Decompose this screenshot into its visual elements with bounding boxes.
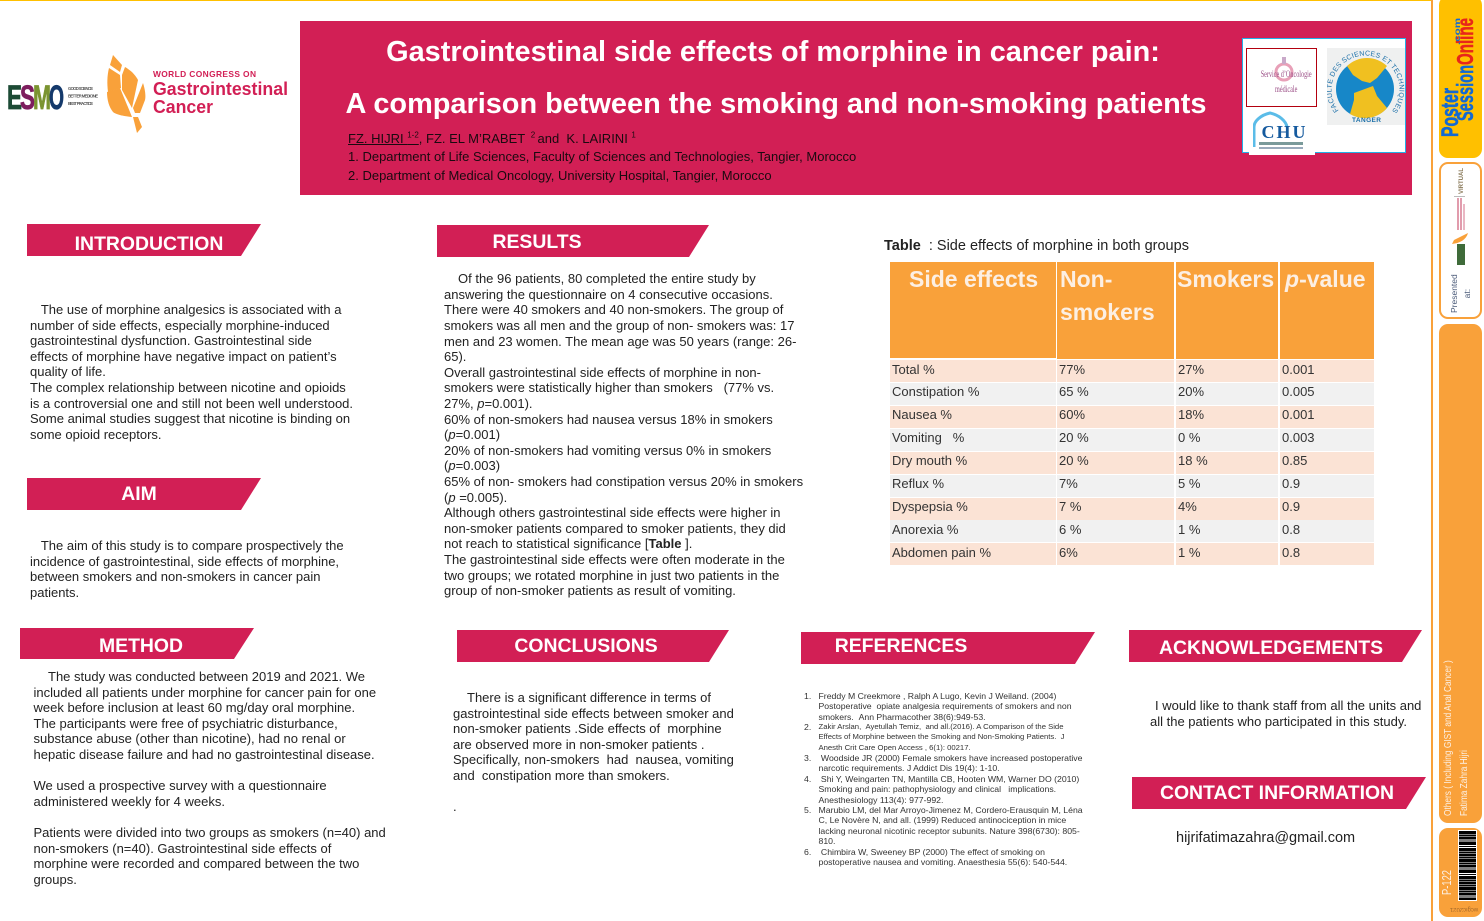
- text: method: non-smokers (n=40). Gastrointestinal side effects of: [34, 841, 331, 856]
- logo: faculty of sciences: TANGER: [1352, 117, 1381, 124]
- authors and affiliations: [348, 131, 856, 183]
- table rows: 60%: [1059, 407, 1085, 422]
- barcode caption: wcgic2021: [1450, 906, 1478, 912]
- text: method: week before inclusion at least 60 mg/day oral morphine.: [34, 700, 355, 715]
- text: method: substance abuse (other than nicotine), had no renal or: [34, 731, 346, 746]
- topic and author text: Others ( Including GIST and Anal Cancer ): [1443, 660, 1454, 816]
- text: method: included all patients under morphine for cancer pain for one: [34, 685, 376, 700]
- reference 1: 1.: [804, 691, 811, 701]
- reference list: Effects of Morphine between the Smoking and Non-Smoking Patients. J: [818, 732, 1064, 741]
- icon: ESMO wordmark: M: [33, 79, 51, 117]
- logo: CHU: CHU: [1262, 122, 1308, 142]
- icon: orange leaf: [107, 55, 145, 133]
- icon: ESMO wordmark: GOOD SCIENCE: [68, 86, 93, 91]
- text: results: (p=0.001): [444, 427, 500, 442]
- reference list: 810.: [818, 836, 835, 846]
- table rows: Constipation %: [892, 384, 979, 399]
- text: results: answering the questionnaire on 4 consecutive occasions.: [444, 287, 773, 302]
- heading: aim: AIM: [121, 483, 157, 505]
- text: results: not reach to statistical significance [Table ].: [444, 536, 692, 551]
- label: presented at: Presented: [1449, 274, 1459, 313]
- table rows: 5 %: [1178, 476, 1200, 491]
- title: Gastrointestinal side effects of morphine in cancer pain:: [386, 36, 1160, 68]
- logo text: .com: [1453, 18, 1462, 45]
- text: results: 65% of non- smokers had constipation versus 20% in smokers: [444, 474, 803, 489]
- reference 2: 2.: [804, 722, 811, 732]
- wordmark: congress name: [153, 69, 288, 117]
- table rows: 0.9: [1282, 476, 1300, 491]
- table rows: 6%: [1059, 545, 1078, 560]
- reference 1: [804, 691, 1072, 722]
- table rows: [890, 360, 1374, 565]
- heading: method: [20, 628, 254, 659]
- divider: [1454, 196, 1465, 197]
- sidebar box: presented at: [1439, 162, 1482, 319]
- table header: p-value: [1285, 266, 1366, 292]
- text: introduction: The use of morphine analgesics is associated with a: [41, 302, 341, 317]
- label: virtual: VIRTUAL: [1459, 168, 1465, 194]
- text: introduction: is a controversial one and still not been well understood.: [30, 396, 353, 411]
- top rule: [0, 0, 1431, 1]
- sidebar panel: topic and author: [1439, 324, 1482, 823]
- text: method: morphine were recorded and compared between the two: [34, 856, 359, 871]
- table header: Smokers: [1177, 266, 1274, 292]
- reference 4: 4.: [804, 774, 811, 784]
- table rows: 0.8: [1282, 545, 1300, 560]
- table rows: 20 %: [1059, 453, 1089, 468]
- text: aim: patients.: [30, 585, 79, 600]
- text: aim: incidence of gastrointestinal, side effects of morphine,: [30, 554, 339, 569]
- reference list: postoperative nausea and vomiting. Anaesthesia 55(6): 540-544.: [818, 857, 1067, 867]
- table rows: 1 %: [1178, 522, 1200, 537]
- text: conclusions: are observed more in non-smoker patients .: [453, 737, 704, 752]
- table rows: 0 %: [1178, 430, 1200, 445]
- reference 6: [804, 847, 1067, 867]
- table rows: 1 %: [1178, 545, 1200, 560]
- text: aim: The aim of this study is to compare prospectively the: [41, 538, 344, 553]
- text: results: Of the 96 patients, 80 completed the entire study by: [458, 271, 756, 286]
- logo: service d'oncologie: [1246, 48, 1317, 107]
- table rows: 18%: [1178, 407, 1204, 422]
- reference list: Anesth Crit Care Open Access , 6(1): 00217.: [818, 743, 971, 752]
- authors and affiliations: FZ. HIJRI 1-2, FZ. EL M’RABET 2 and K. LAIRINI 1: [348, 131, 636, 146]
- icon: ESMO wordmark: BEST PRACTICE: [68, 101, 93, 106]
- text: method: Patients were divided into two groups as smokers (n=40) and: [34, 825, 386, 840]
- table rows: Dyspepsia %: [892, 499, 968, 514]
- heading: contact information: CONTACT INFORMATION: [1160, 782, 1394, 804]
- text: results: 20% of non-smokers had vomiting versus 0% in smokers: [444, 443, 771, 458]
- reference list: Woodside JR (2000) Female smokers have increased postoperative: [821, 753, 1082, 763]
- text: introduction: number of side effects, especially morphine-induced: [30, 318, 330, 333]
- table rows: 0.005: [1282, 384, 1315, 399]
- text: results: Overall gastrointestinal side effects of morphine in non-: [444, 365, 761, 380]
- logo text: Session: [1452, 65, 1478, 121]
- text: conclusions: [453, 690, 734, 814]
- text: introduction: [30, 302, 353, 442]
- reference list: lacking neuronal nicotinic receptor subunits. Nature 398(6730): 805-: [818, 826, 1080, 836]
- logo text: [1439, 18, 1478, 137]
- text: results: The gastrointestinal side effects were often moderate in the: [444, 552, 785, 567]
- text: results: men and 23 women. The mean age was 50 years (range: 26-: [444, 334, 796, 349]
- heading: method: METHOD: [99, 635, 183, 657]
- sidebar panel: barcode: [1439, 828, 1482, 917]
- heading: conclusions: CONCLUSIONS: [514, 635, 658, 657]
- poster number: P-122: [1439, 870, 1454, 895]
- table rows: 6 %: [1059, 522, 1081, 537]
- label: presented at: [1449, 274, 1472, 313]
- heading: acknowledgements: [1129, 630, 1422, 662]
- barcode: [1458, 830, 1477, 901]
- text: method: The study was conducted between 2019 and 2021. We: [48, 669, 365, 684]
- topic and author text: Fatima Zahra Hijri: [1459, 750, 1470, 816]
- text: results: 60% of non-smokers had nausea versus 18% in smokers: [444, 412, 773, 427]
- table rows: 0.85: [1282, 453, 1307, 468]
- reference list: [804, 691, 1083, 867]
- icon: ESMO wordmark: E: [7, 79, 22, 117]
- icon: ESMO wordmark: S: [20, 79, 35, 117]
- reference 5: 5.: [804, 805, 811, 815]
- reference list: Zakir Arslan, Ayetullah Temiz, and all.(2016). A Comparison of the Side: [818, 722, 1064, 731]
- heading: introduction: INTRODUCTION: [75, 233, 223, 255]
- text: method: The participants were free of psychiatric disturbance,: [34, 716, 338, 731]
- mini logo: [1452, 198, 1468, 265]
- reference 4: [804, 774, 1079, 805]
- table rows: Dry mouth %: [892, 453, 967, 468]
- table rows: 65 %: [1059, 384, 1089, 399]
- table rows: 27%: [1178, 362, 1204, 377]
- heading: references: REFERENCES: [835, 635, 967, 657]
- text: introduction: Some animal studies suggest that nicotine is binding on: [30, 411, 350, 426]
- text: results: two groups; we rotated morphine in just two patients in the: [444, 568, 779, 583]
- text: introduction: some opioid receptors.: [30, 427, 162, 442]
- heading: references: [801, 632, 1095, 664]
- reference list: C, Le Novère N, and all. (1999) Reduced antinociception in mice: [818, 815, 1066, 825]
- table caption: Table : Side effects of morphine in both groups: [884, 238, 1189, 254]
- heading: results: [437, 225, 709, 257]
- reference list: Anesthesiology 113(4): 977-992.: [818, 795, 943, 805]
- table rows: 0.003: [1282, 430, 1315, 445]
- reference 5: [804, 805, 1083, 846]
- text: acknowledgements: [1150, 698, 1421, 729]
- text: acknowledgements: I would like to thank staff from all the units and: [1155, 698, 1421, 713]
- text: conclusions: There is a significant difference in terms of: [467, 690, 711, 705]
- reference 3: 3.: [804, 753, 811, 763]
- table header: smokers: [1060, 299, 1155, 325]
- wordmark: congress name: Cancer: [153, 97, 213, 117]
- text: conclusions: .: [453, 799, 457, 814]
- reference list: Shi Y, Weingarten TN, Mantilla CB, Hooten WM, Warner DO (2010): [821, 774, 1079, 784]
- topic and author text: [1443, 660, 1470, 816]
- text: aim: between smokers and non-smokers in cancer pain: [30, 569, 320, 584]
- heading: contact information: [1132, 777, 1426, 809]
- reference 3: [804, 753, 1082, 773]
- text: conclusions: non-smoker patients .Side effects of morphine: [453, 721, 722, 736]
- logo: faculty of sciences: FACULTE DES SCIENCES ET TECHNIQUES: [1327, 50, 1404, 113]
- table rows: 0.9: [1282, 499, 1300, 514]
- text: email: hijrifatimazahra@gmail.com: [1176, 830, 1355, 846]
- heading: acknowledgements: ACKNOWLEDGEMENTS: [1159, 637, 1383, 659]
- sidebar: [1431, 0, 1482, 921]
- label: presented at: at:: [1462, 289, 1472, 298]
- table header: [890, 262, 1374, 359]
- text: results: non-smoker patients compared to smoker patients, they did: [444, 521, 786, 536]
- table rows: 20 %: [1059, 430, 1089, 445]
- text: method: [34, 669, 386, 887]
- text: results: (p =0.005).: [444, 490, 507, 505]
- text: results: 27%, p=0.001).: [444, 396, 533, 411]
- table rows: 0.001: [1282, 407, 1315, 422]
- text: conclusions: and constipation more than smokers.: [453, 768, 670, 783]
- reference list: Marubio LM, del Mar Arroyo-Jimenez M, Cordero-Erausquin M, Léna: [818, 805, 1083, 815]
- table rows: 77%: [1059, 362, 1085, 377]
- table rows: Reflux %: [892, 476, 944, 491]
- reference list: Smoking and pain: pathophysiology and clinical implications.: [818, 784, 1056, 794]
- table rows: 4%: [1178, 499, 1197, 514]
- logo: service d'oncologie: médicale: [1275, 85, 1297, 95]
- authors and affiliations: 2. Department of Medical Oncology, University Hospital, Tangier, Morocco: [348, 168, 772, 183]
- table rows: Anorexia %: [892, 522, 958, 537]
- table rows: 0.001: [1282, 362, 1315, 377]
- wordmark: congress name: WORLD CONGRESS ON: [153, 69, 256, 79]
- authors and affiliations: 1. Department of Life Sciences, Faculty of Sciences and Technologies, Tangier, Morocco: [348, 149, 856, 164]
- table rows: 0.8: [1282, 522, 1300, 537]
- wordmark: congress name: Gastrointestinal: [153, 79, 288, 99]
- text: method: groups.: [34, 872, 77, 887]
- table rows: 18 %: [1178, 453, 1208, 468]
- heading: conclusions: [457, 630, 729, 662]
- table rows: Nausea %: [892, 407, 952, 422]
- sidebar rule: [1431, 0, 1433, 921]
- text: method: hepatic disease failure and had no gastrointestinal disease.: [34, 747, 375, 762]
- title: [346, 36, 1206, 120]
- table rows: Total %: [892, 362, 935, 377]
- reference list: Chimbira W, Sweeney BP (2000) The effect of smoking on: [821, 847, 1045, 857]
- table rows: Abdomen pain %: [892, 545, 991, 560]
- table rows: 7%: [1059, 476, 1078, 491]
- reference list: smokers. Ann Pharmacother 38(6):949-53.: [818, 712, 986, 722]
- icon: ESMO wordmark: BETTER MEDICINE: [68, 94, 98, 98]
- heading: introduction: [27, 224, 261, 256]
- text: method: administered weekly for 4 weeks.: [34, 794, 225, 809]
- table header: Non-: [1060, 266, 1112, 292]
- header band: [300, 21, 1412, 195]
- icon: ESMO wordmark: [7, 79, 98, 117]
- reference 2: [804, 722, 1064, 752]
- logo: service d'oncologie: Service d’Oncologie: [1261, 70, 1312, 80]
- text: results: There were 40 smokers and 40 non-smokers. The group of: [444, 302, 783, 317]
- text: results: Although others gastrointestinal side effects were higher in: [444, 505, 781, 520]
- text: method: We used a prospective survey with a questionnaire: [34, 778, 327, 793]
- table rows: 7 %: [1059, 499, 1081, 514]
- text: results: smokers were statistically higher than smokers (77% vs.: [444, 380, 774, 395]
- logo: CHU: [1249, 109, 1315, 155]
- text: introduction: The complex relationship between nicotine and opioids: [30, 380, 346, 395]
- heading: results: RESULTS: [492, 231, 582, 253]
- text: introduction: quality of life.: [30, 364, 106, 379]
- text: results: 65).: [444, 349, 466, 364]
- table: side effects: [890, 262, 1374, 565]
- text: results: group of non-smoker patients as result of vomiting.: [444, 583, 736, 598]
- table rows: 20%: [1178, 384, 1204, 399]
- reference list: narcotic requirements. J Addict Dis 19(4): 1-10.: [818, 763, 1000, 773]
- text: conclusions: Specifically, non-smokers had nausea, vomiting: [453, 752, 734, 767]
- sidebar tab: poster session online: [1439, 0, 1482, 158]
- institution logos: [1242, 38, 1406, 153]
- text: introduction: gastrointestinal dysfunction. Gastrointestinal side: [30, 333, 312, 348]
- text: acknowledgements: all the patients who participated in this study.: [1150, 714, 1407, 729]
- logo: ESMO World Congress: [7, 55, 288, 133]
- text: results: (p=0.003): [444, 458, 500, 473]
- heading: aim: [27, 478, 261, 510]
- text: results: [444, 271, 803, 598]
- reference list: Freddy M Creekmore , Ralph A Lugo, Kevin J Weiland. (2004): [818, 691, 1056, 701]
- reference 6: 6.: [804, 847, 811, 857]
- title: A comparison between the smoking and non-smoking patients: [346, 88, 1206, 120]
- icon: ESMO wordmark: O: [49, 79, 64, 117]
- table rows: Vomiting %: [892, 430, 964, 445]
- table header: Side effects: [909, 266, 1038, 292]
- text: results: smokers was all men and the group of non- smokers was: 17: [444, 318, 794, 333]
- text: introduction: effects of morphine have negative impact on patient’s: [30, 349, 337, 364]
- reference list: Postoperative opiate analgesia requirements of smokers and non: [818, 701, 1072, 711]
- text: aim: [30, 538, 344, 600]
- text: conclusions: gastrointestinal side effects between smoker and: [453, 706, 734, 721]
